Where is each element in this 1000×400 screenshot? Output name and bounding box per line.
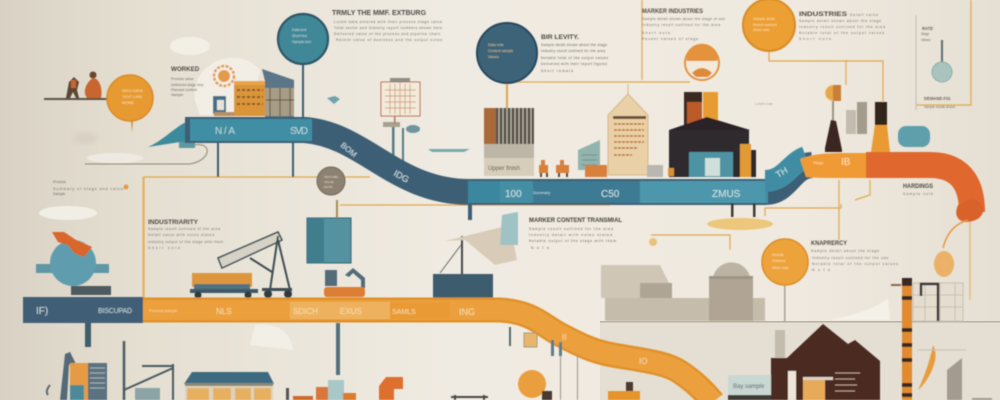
small boat xyxy=(428,149,470,152)
connector drop xyxy=(934,220,968,277)
icon: gear xyxy=(214,66,234,86)
text block: bill: BIR LEVITY. xyxy=(541,34,579,41)
cone silo xyxy=(608,84,648,175)
teal tower xyxy=(578,140,607,177)
text block: left label: Sample xyxy=(171,93,183,97)
bottom cart xyxy=(608,382,640,400)
storage building: Upper finish xyxy=(488,166,520,172)
orange badge xyxy=(685,44,719,80)
bottom sign: Bay sample xyxy=(733,384,765,390)
orange circle left: INFO DATA xyxy=(122,88,143,93)
text block: capability xyxy=(811,241,898,272)
heading: top centre: TRMLY THE MMF. EXTBURG xyxy=(332,8,426,17)
navy circle: Values xyxy=(488,55,499,59)
factory top left xyxy=(213,69,294,117)
pipeline: upper: C50 xyxy=(601,189,620,200)
bench xyxy=(451,395,488,400)
heading: top centre: Lorem data entered with their process stage value xyxy=(334,20,442,24)
book icon xyxy=(381,78,420,116)
text block: top right: Notable total of the output values xyxy=(799,31,884,35)
orange pump xyxy=(379,377,403,400)
text block: industry xyxy=(148,219,223,250)
cloud bottom xyxy=(250,324,293,350)
text block: capability: Notable total of the output values xyxy=(812,262,898,266)
hanging items xyxy=(509,327,578,400)
text block: industry: Short note xyxy=(148,246,180,250)
connector post xyxy=(468,205,472,220)
text block left small: Sample xyxy=(53,192,65,196)
pipeline: upper: BOM xyxy=(339,141,359,159)
orange circle top right: Sample detail xyxy=(753,17,775,21)
pipeline: lower: IF) xyxy=(36,306,48,317)
text block: bill: Delivered with their report figures xyxy=(541,62,607,66)
right bottom shapes xyxy=(918,345,992,400)
heading: top centre: Recent value of business and the output notes xyxy=(336,38,442,42)
lightbulb xyxy=(825,85,841,126)
pipeline: lower: ING xyxy=(459,307,475,317)
orange circle left: TEXT LINE xyxy=(122,94,142,99)
pipeline: upper: IDG xyxy=(392,168,411,185)
pipeline: lower: BISCUPAD xyxy=(98,308,132,315)
note stack xyxy=(846,102,867,134)
text block: production: MARKER INDUSTRIES xyxy=(642,8,704,15)
pipeline: lower: SDICH xyxy=(293,307,318,316)
pipeline: upper: SVD xyxy=(290,126,308,137)
heading: top centre: Delivered value of the process and pipeline chain xyxy=(334,32,440,36)
text block: capability: KNAPRERCY xyxy=(811,241,847,247)
storage building xyxy=(484,108,534,176)
text block: production: Industry result outlined for the area xyxy=(642,23,720,27)
pipeline: upper: Summary xyxy=(533,190,550,195)
dark brown building xyxy=(771,324,880,400)
text block: left label: Process value xyxy=(171,77,194,81)
orange dot bottom xyxy=(518,370,552,400)
text block: transitional: Sample result outlined for the area xyxy=(529,227,613,231)
gauge panel: Stage xyxy=(921,32,930,36)
cart xyxy=(324,268,365,297)
faint dash note: Lorem note xyxy=(755,102,773,106)
teal circle top: Short line xyxy=(292,34,307,38)
teal circle top: Data text xyxy=(292,28,306,32)
text block: bill: Sample detail shown about the stage xyxy=(541,43,607,47)
gauge panel: Sample results shown xyxy=(924,105,955,109)
bottom sign xyxy=(728,375,781,400)
text block: transitional: Industry detail with notes stated xyxy=(529,233,612,237)
bottom machine left xyxy=(47,352,107,400)
bottom crane xyxy=(124,341,174,400)
machines xyxy=(539,160,569,177)
navy circle xyxy=(477,23,537,108)
text block left small: Summary of stage and value xyxy=(53,187,123,191)
smudge left xyxy=(73,132,97,144)
navy circle: Data note xyxy=(488,43,504,47)
text block: capability: Industry result outlined for the use xyxy=(812,256,888,260)
pipeline: upper: 100 xyxy=(505,189,522,200)
orange circle top right xyxy=(743,0,795,51)
orange circle left xyxy=(107,75,153,133)
gold pile with legs xyxy=(707,203,773,230)
small circle label: VALUE xyxy=(324,180,334,184)
gauge panel: RATE xyxy=(922,26,933,31)
text block: industry: Industry output of the stage with them xyxy=(148,240,223,244)
supports under pipe xyxy=(179,130,294,177)
text block: top right: Short note xyxy=(799,37,831,41)
connector lines xyxy=(143,0,971,300)
text block: production: Sample detail shown about the stage of use xyxy=(642,17,725,21)
small bulb xyxy=(649,238,657,246)
striped chimney xyxy=(891,278,912,400)
dark factory xyxy=(647,92,756,177)
orange circle top right: Short note xyxy=(753,28,770,32)
gauge panel: DEMAND FIG xyxy=(924,96,951,101)
text block: bill: Short remark xyxy=(541,69,573,73)
text block: left label: Planned content xyxy=(171,88,197,92)
pipeline: upper: IB xyxy=(841,157,851,168)
teal capsule xyxy=(898,126,930,147)
pipeline: lower: IO xyxy=(639,357,647,366)
gauge panel xyxy=(921,26,955,109)
cloud centre xyxy=(195,58,260,115)
orange circle right: Results xyxy=(772,253,784,257)
text block: right: Sample note xyxy=(903,192,933,196)
pipeline: lower: II xyxy=(562,333,566,342)
pipeline: lower xyxy=(23,297,713,400)
text block: transitional: MARKER CONTENT TRANSMIAL xyxy=(529,217,622,224)
text block: right xyxy=(903,184,933,196)
tower bottom xyxy=(286,323,356,400)
teal circle top xyxy=(278,14,328,120)
small fish icon xyxy=(327,96,340,104)
small circle label xyxy=(317,167,345,195)
heading: top centre xyxy=(332,8,442,42)
text block: left label xyxy=(171,66,204,97)
orange circle top right: Result outlined xyxy=(753,23,777,27)
text block: production: Recent values of stage xyxy=(642,37,698,41)
globe xyxy=(36,232,111,295)
heading: top centre: Total sector and industry report numbers shown here xyxy=(334,26,442,30)
chimneys xyxy=(825,102,890,152)
text block: top right: Industry result outlined for the area xyxy=(799,25,885,29)
factory grid right xyxy=(827,283,963,321)
lamp posts xyxy=(383,116,420,162)
orange circle right: Short note xyxy=(772,266,789,270)
pipeline: upper: TH xyxy=(774,165,789,180)
text block: top right: INDUSTRIES xyxy=(799,11,848,18)
orange circle left: MORE xyxy=(122,100,134,105)
text block left small xyxy=(53,180,128,196)
pipeline: upper xyxy=(148,118,983,222)
text block: production: Short note xyxy=(642,31,670,35)
flag and container xyxy=(433,212,518,299)
gauge panel: Values xyxy=(921,38,931,42)
text block: bill: Notable total of the output values xyxy=(541,56,608,60)
pipeline: lower: Process sample xyxy=(149,308,178,313)
beige buildings xyxy=(601,262,765,321)
text block: industry: Detail value with notes stated xyxy=(148,233,214,237)
text block: industry: Sample result outlined of the area xyxy=(148,227,220,231)
teal circle top: Sample text xyxy=(292,40,311,44)
text block: capability: Sample detail about the stage xyxy=(811,249,879,253)
text block: top right xyxy=(799,11,885,41)
pipeline: upper: N/A xyxy=(215,126,235,137)
text block: industry: INDUSTRIARITY xyxy=(148,219,199,226)
pipeline: lower: NLS xyxy=(216,307,232,316)
support post xyxy=(85,323,91,347)
text block: left label: Delivered stage step xyxy=(171,83,204,87)
warehouse xyxy=(184,372,274,400)
crane vehicle xyxy=(190,232,292,298)
text block: bill: Industry result outlined for the area xyxy=(541,49,605,53)
text block left small: Process xyxy=(53,180,66,184)
navy circle: Content sample xyxy=(488,49,513,53)
text block: top right: Sample detail shown about the stage xyxy=(799,19,881,23)
pipeline: lower: EXUS xyxy=(340,307,362,316)
text block: transitional: Note xyxy=(531,246,549,250)
cloud shape left xyxy=(39,206,97,220)
text block: left label: WORKED xyxy=(171,66,200,73)
text block: transitional: Notable output of the stage with them xyxy=(529,239,616,243)
pipeline: lower: SAMLS xyxy=(392,309,416,316)
text block: capability: Note xyxy=(812,268,830,272)
small circle label: TEXT ABC xyxy=(324,175,339,179)
cloud left xyxy=(170,37,210,55)
pipeline: upper: ZMUS xyxy=(712,189,741,200)
orange circle right xyxy=(762,239,808,322)
text block: production xyxy=(642,8,725,41)
text block: right: HARDINGS xyxy=(903,184,933,190)
pipeline: upper: Stage xyxy=(813,160,824,165)
small circle label: NOTE xyxy=(324,185,332,189)
figures xyxy=(44,72,108,100)
orange circle right: Outlined xyxy=(772,259,785,263)
text block: top right: Detail value xyxy=(850,13,878,17)
text block: transitional xyxy=(529,217,622,250)
teal box xyxy=(307,200,351,263)
cloud lower xyxy=(87,153,143,163)
text block: bill xyxy=(541,34,608,73)
curved lead xyxy=(85,145,207,164)
